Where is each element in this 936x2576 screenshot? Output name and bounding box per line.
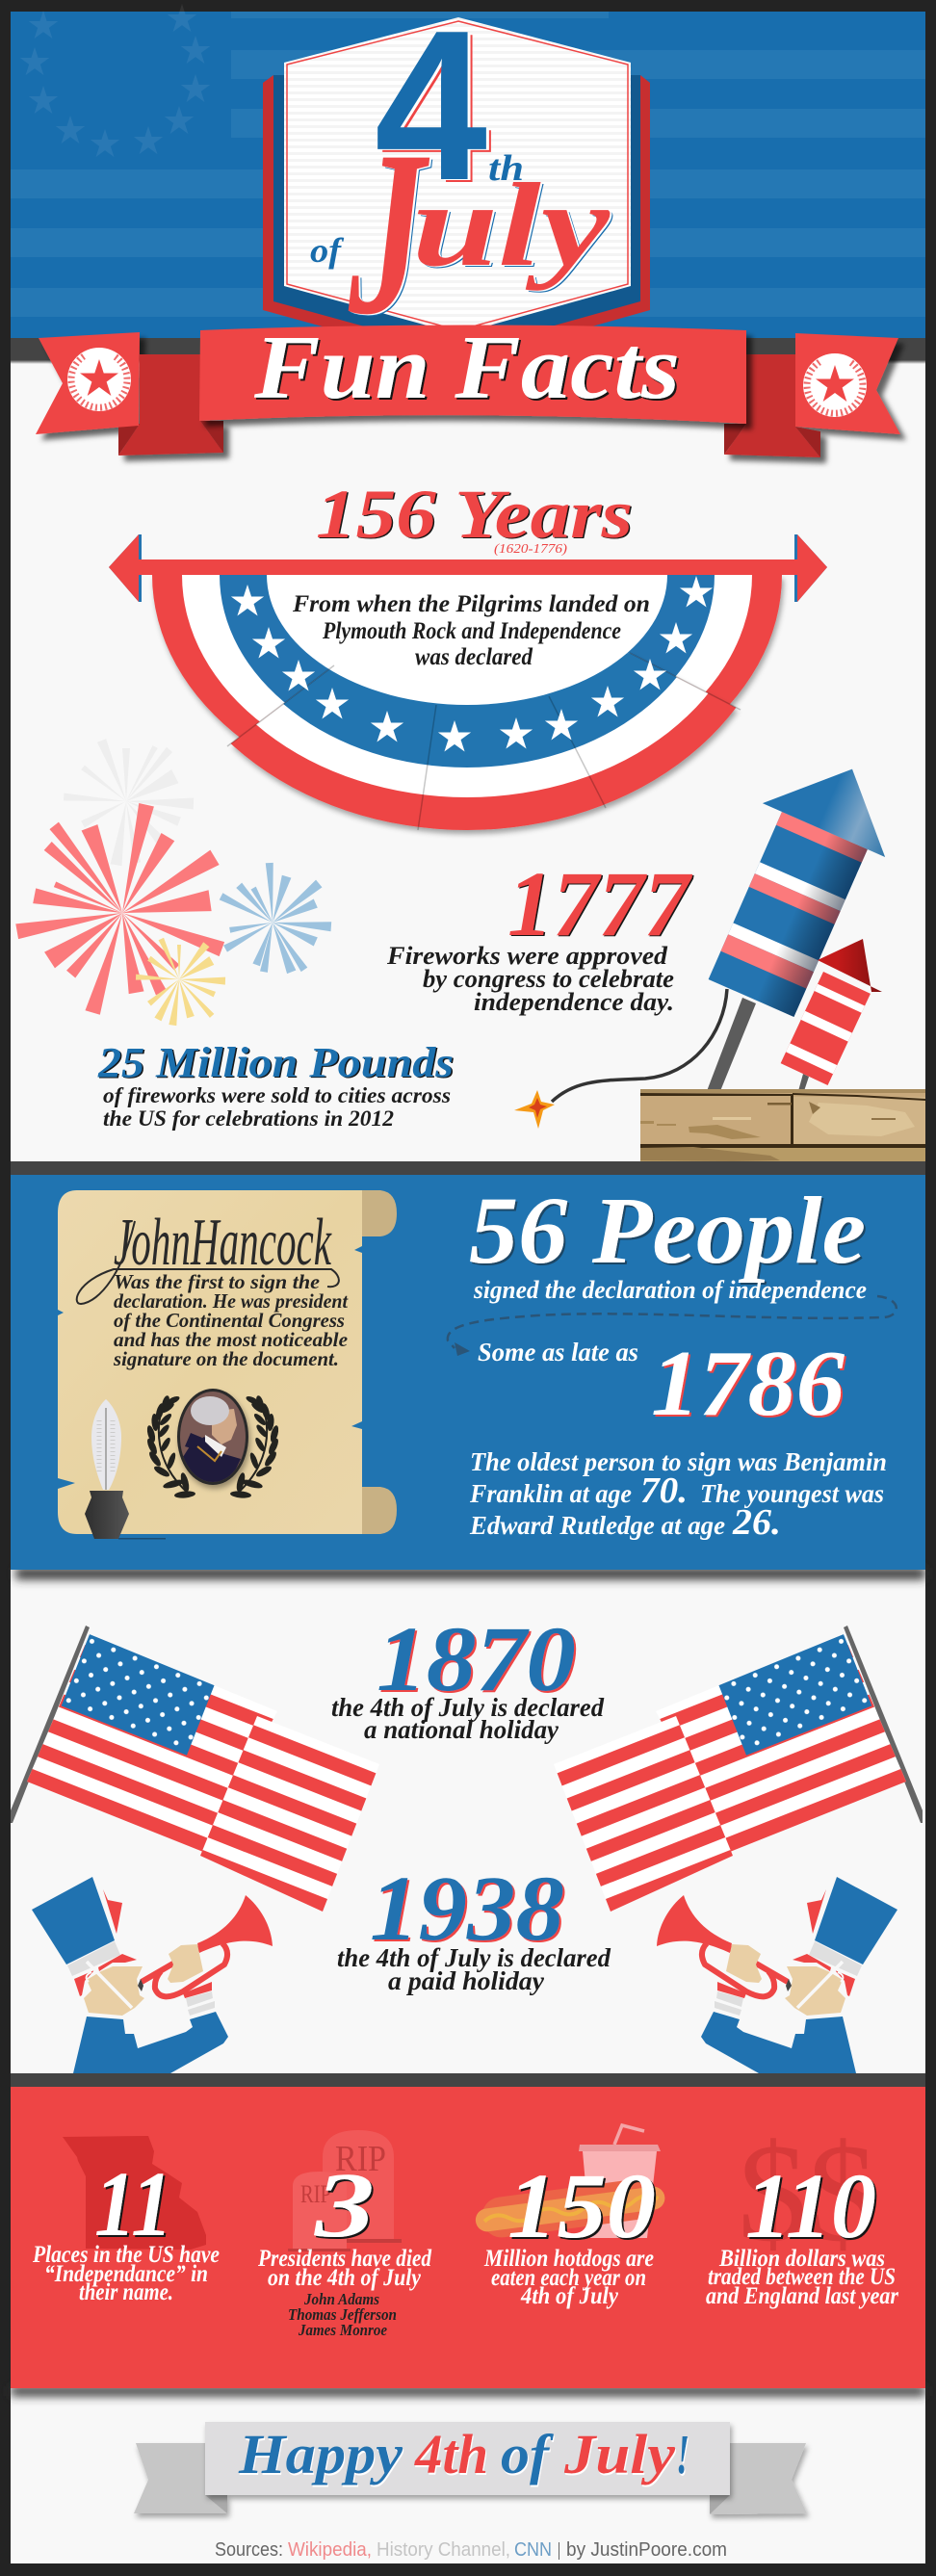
date range: (1620-1776) (494, 542, 567, 557)
firework: blue (220, 863, 331, 974)
trumpeter right (657, 1877, 897, 2073)
sources: History Channel, (377, 2539, 510, 2561)
ink bottle (85, 1491, 129, 1539)
happy 4th text: July (563, 2423, 675, 2485)
red section (11, 2087, 925, 2388)
icon: dollars: $$ (738, 2115, 877, 2271)
stat: 3 (257, 2153, 431, 2339)
text: paid holiday: a paid holiday (388, 1966, 545, 1995)
July: uly (412, 159, 611, 291)
grey ribbon centre (205, 2422, 730, 2495)
names: John Adams (303, 2290, 379, 2308)
hancock text: Was the first to sign the (114, 1270, 320, 1293)
icon: tombstones: RIP (300, 2180, 331, 2208)
text: national holiday (331, 1693, 604, 1744)
ribbon: fun facts (36, 318, 900, 457)
stat: 11 (32, 2152, 220, 2305)
dark band above red section (11, 2073, 925, 2087)
text: oldest and youngest: The oldest person to sign was Benjamin (470, 1447, 887, 1476)
sources (215, 2539, 727, 2561)
text: oldest and youngest: Edward Rutledge at age (469, 1511, 725, 1540)
red section shadow (11, 2386, 925, 2396)
July: J (351, 104, 432, 365)
spark (514, 1090, 555, 1129)
flag right (472, 1602, 936, 1973)
signature (77, 1206, 339, 1304)
of: of (310, 231, 344, 270)
text: some as late as: Some as late as (478, 1338, 638, 1366)
header flag background (11, 4, 925, 338)
text: paid holiday: the 4th of July is declared (337, 1943, 611, 1972)
ribbon left tail (36, 332, 223, 455)
scroll (58, 1190, 397, 1539)
caption: 110: traded between the US (708, 2264, 896, 2290)
caption: 11 (32, 2242, 220, 2305)
text: national holiday: the 4th of July is declared (331, 1693, 604, 1722)
icon: tombstones: RIP (335, 2139, 386, 2179)
caption: 110: and England last year (706, 2283, 898, 2309)
happy 4th text: of (501, 2423, 555, 2485)
text: oldest and youngest: The youngest was (700, 1479, 884, 1508)
fold lines (227, 653, 741, 830)
wooden planks (640, 1089, 925, 1161)
caption: 150: 4th of July (520, 2283, 619, 2309)
caption: 3: on the 4th of July (268, 2265, 422, 2291)
hancock text (113, 1270, 349, 1370)
trumpeter left (32, 1877, 273, 2073)
text: oldest and youngest: 26. (732, 1502, 781, 1543)
fun facts heading: Fun Facts (253, 318, 680, 418)
rocket stick (707, 998, 756, 1091)
stat: 150: 150 (507, 2154, 656, 2257)
grey ribbon tails (134, 2443, 807, 2514)
happy 4th text: ! (676, 2423, 689, 2485)
sources: Sources: (215, 2539, 283, 2561)
fuse (552, 989, 727, 1102)
signature: JohnHancock (114, 1206, 332, 1280)
stat: 150 (483, 2154, 656, 2309)
happy 4th text (238, 2423, 689, 2485)
firework: grey (64, 739, 194, 866)
text: fireworks sold: of fireworks were sold to cities across (103, 1083, 451, 1107)
dark band above blue section (11, 1161, 925, 1175)
July: J (350, 103, 431, 364)
firework: yellow (136, 938, 225, 1026)
hancock text: of the Continental Congress (114, 1309, 345, 1332)
ribbon centre (199, 325, 746, 424)
text: fireworks approved: independence day. (474, 988, 674, 1016)
large rocket (689, 742, 912, 1025)
hancock text: declaration. He was president (114, 1289, 349, 1313)
blue section shadow (15, 1568, 925, 1579)
text: oldest and youngest: Franklin at age (469, 1479, 632, 1508)
July (348, 102, 613, 365)
heading: 156 years: 156 Years (316, 476, 633, 553)
bunting caption: was declared (415, 644, 533, 670)
th: th (488, 148, 524, 189)
stat: 110: 110 (745, 2154, 876, 2257)
text: paid holiday (337, 1943, 611, 1995)
happy 4th text: Happy (238, 2423, 403, 2485)
caption: 11: their name. (79, 2279, 173, 2305)
names: Thomas Jefferson (288, 2305, 397, 2324)
stat: 3: 3 (314, 2153, 375, 2256)
heading: 1870: 1870 (377, 1607, 576, 1710)
lower swag (231, 653, 740, 838)
portrait (177, 1387, 248, 1487)
July: uly (414, 160, 612, 292)
arrow: span (109, 534, 827, 602)
heading: 1786: 1786 (651, 1332, 845, 1436)
heading: 1777: 1777 (507, 852, 693, 955)
text: oldest and youngest: 70. (640, 1470, 688, 1511)
heading: 25 million pounds: 25 Million Pounds (97, 1039, 454, 1086)
ribbon: happy 4th (134, 2422, 807, 2514)
caption: 3: Presidents have died (257, 2246, 431, 2272)
names (288, 2290, 397, 2339)
dashed arrow (448, 1296, 897, 1356)
medallion left (67, 348, 131, 411)
bunting caption: From when the Pilgrims landed on (292, 591, 650, 617)
caption: 3 (257, 2246, 431, 2291)
dark band under header (11, 338, 925, 364)
inner white (267, 575, 667, 705)
quill (91, 1399, 121, 1490)
caption: 110: Billion dollars was (718, 2246, 885, 2272)
text: fireworks approved (386, 942, 674, 1016)
icon: missouri (63, 2136, 206, 2250)
bunting (152, 575, 782, 830)
medallion right (803, 353, 867, 417)
small rocket (781, 939, 882, 1085)
title badge (263, 0, 650, 365)
text: fireworks sold (103, 1083, 451, 1131)
text: fireworks approved: by congress to celebrate (423, 965, 674, 993)
happy 4th text: 4th (414, 2423, 488, 2485)
hancock text: and has the most noticeable (114, 1328, 348, 1351)
caption: 150 (483, 2246, 654, 2309)
bunting caption (292, 591, 650, 670)
heading: 56 people: 56 People (469, 1177, 866, 1284)
icon: tombstones (288, 2130, 402, 2251)
ribbon right tail (724, 333, 900, 457)
caption: 110 (706, 2246, 898, 2309)
text: fireworks sold: the US for celebrations in 2012 (103, 1106, 394, 1131)
portrait wreath (145, 1394, 280, 1498)
icon: hotdog (473, 2175, 667, 2241)
caption: 150: Million hotdogs are (483, 2246, 654, 2272)
text: signed the declaration: signed the declaration of independence (473, 1276, 867, 1304)
caption: 11: “Independance” in (44, 2261, 208, 2287)
bunting stars (231, 576, 713, 752)
small rocket stick (798, 1074, 809, 1091)
icon: soda (579, 2125, 661, 2238)
sources: CNN (514, 2539, 552, 2561)
firework: red (15, 803, 224, 1015)
upper swag (152, 575, 782, 810)
sources: by JustinPoore.com (566, 2539, 727, 2561)
July: J (348, 102, 429, 363)
caption: 150: eaten each year on (491, 2265, 646, 2291)
text: oldest and youngest (469, 1447, 887, 1543)
heading: 1938: 1938 (370, 1857, 564, 1960)
stat: 110 (706, 2154, 898, 2309)
text: fireworks approved: Fireworks were approved (386, 942, 668, 970)
flag left (0, 1602, 461, 1973)
text: national holiday: a national holiday (364, 1715, 559, 1744)
names: James Monroe (298, 2321, 387, 2339)
hancock text: signature on the document. (113, 1347, 339, 1370)
July: uly (415, 161, 613, 293)
caption: 11: Places in the US have (32, 2242, 220, 2268)
blue section (11, 1175, 925, 1570)
sources: Wikipedia, (288, 2539, 372, 2561)
stat: 11: 11 (94, 2152, 172, 2255)
bunting caption: Plymouth Rock and Independence (322, 618, 621, 644)
